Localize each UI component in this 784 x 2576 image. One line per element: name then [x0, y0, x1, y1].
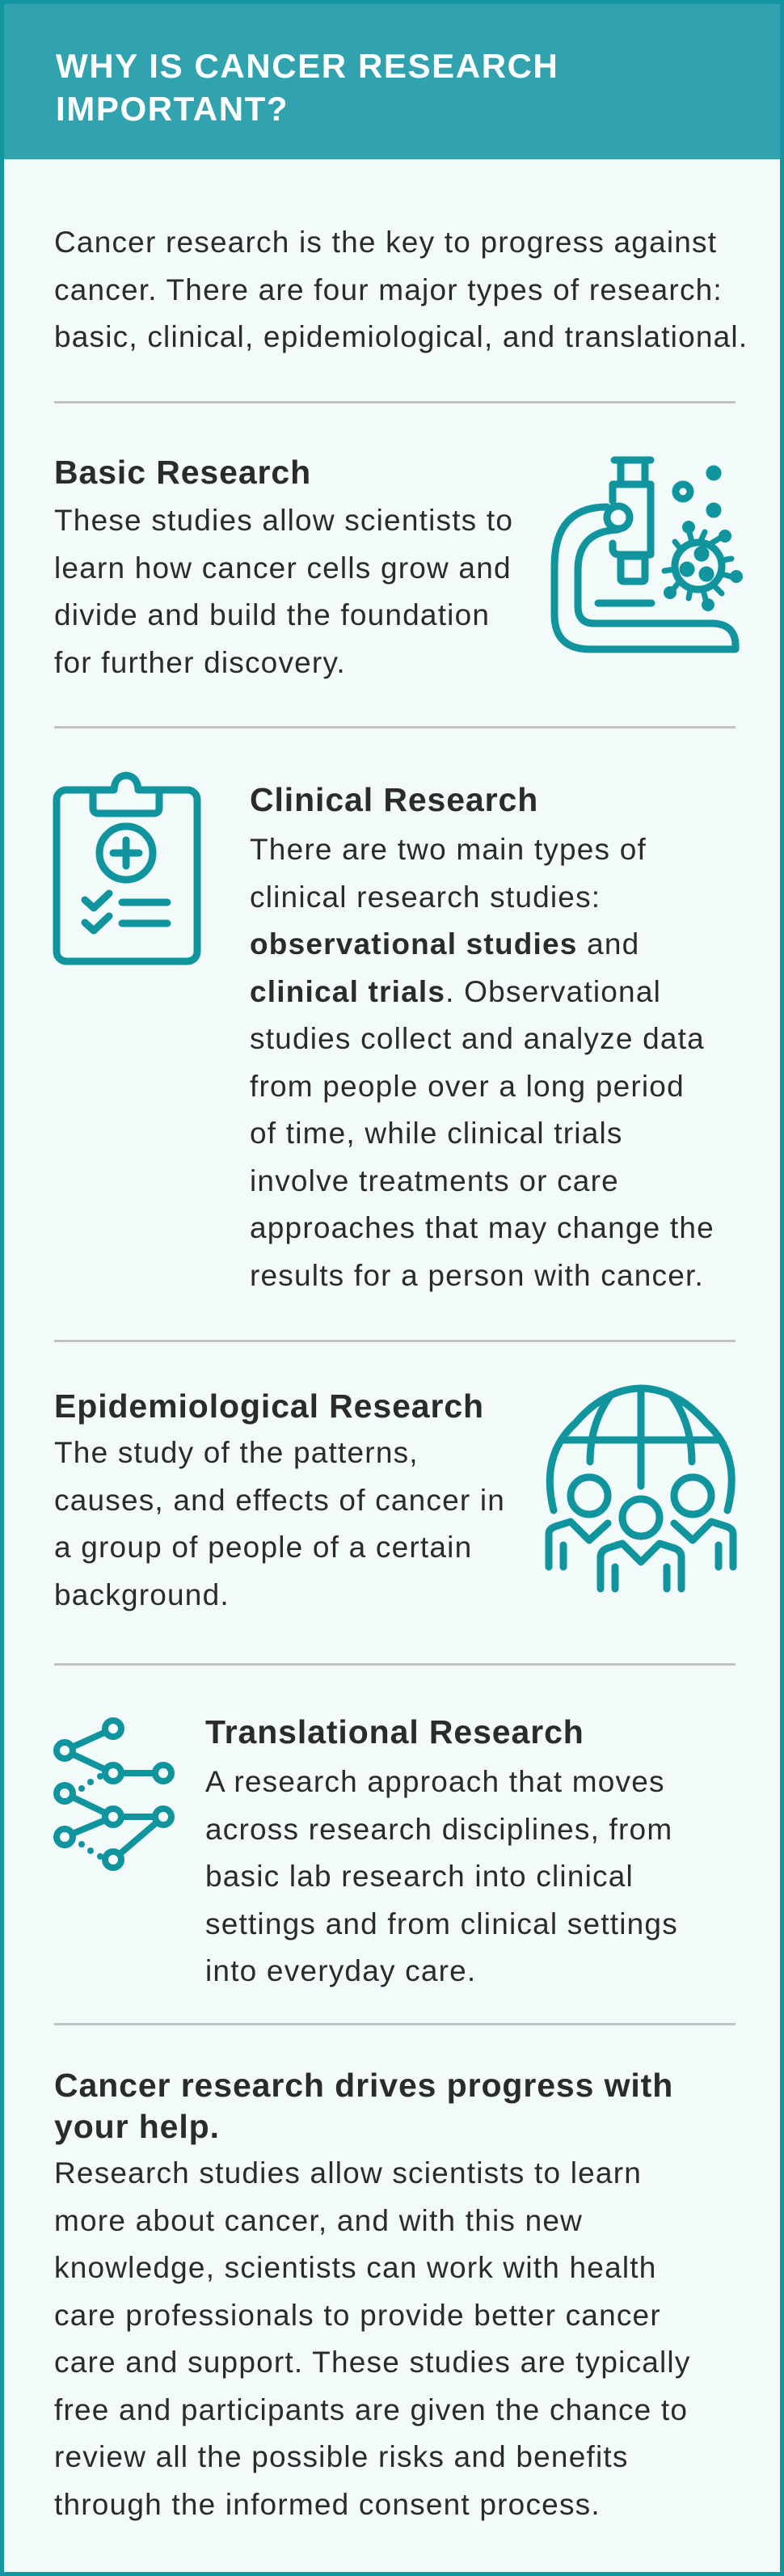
panel: translational research	[205, 1713, 678, 1987]
text: clinical research: clinical trials. Observational	[250, 975, 661, 1007]
text: translational research: settings and from clinical settings	[205, 1907, 678, 1940]
text: translational research: across research disciplines, from	[205, 1813, 672, 1845]
icon: translational network	[53, 1717, 175, 1871]
text: closing: care and support. These studies are typically	[54, 2346, 691, 2379]
title: IMPORTANT?	[56, 90, 289, 128]
text: clinical research: from people over a long period	[250, 1069, 685, 1103]
text: translational research: A research approach that moves	[205, 1765, 665, 1798]
heading: epidemiological research: Epidemiological Research	[54, 1387, 484, 1425]
title	[56, 47, 558, 128]
text: clinical research: clinical research studies:	[250, 880, 601, 914]
heading: clinical research: Clinical Research	[250, 781, 538, 818]
heading: closing: Cancer research drives progress with	[54, 2067, 673, 2104]
panel: epidemiological research	[54, 1387, 505, 1611]
text: translational research	[205, 1765, 678, 1987]
text: closing: Research studies allow scientists to learn	[54, 2156, 642, 2190]
text: closing: free and participants are given the chance to	[54, 2393, 688, 2426]
text: clinical research: There are two main types of	[250, 833, 647, 866]
text: clinical research: studies collect and analyze data	[250, 1022, 705, 1055]
panel: closing message	[54, 2067, 691, 2521]
intro text: Cancer research is the key to progress against	[54, 226, 717, 259]
text: basic research: for further discovery.	[54, 645, 346, 679]
text: epidemiological research: a group of people of a certain	[54, 1531, 472, 1564]
text: basic research: learn how cancer cells grow and	[54, 551, 512, 584]
heading: closing	[54, 2067, 673, 2145]
text: clinical research: approaches that may change the	[250, 1211, 714, 1244]
text: epidemiological research: background.	[54, 1578, 230, 1611]
heading: closing: your help.	[54, 2108, 220, 2145]
intro text: basic, clinical, epidemiological, and translational.	[54, 320, 748, 353]
text: epidemiological research: The study of the patterns,	[54, 1436, 419, 1469]
text: closing: care professionals to provide better cancer	[54, 2298, 661, 2332]
text: translational research: into everyday care.	[205, 1954, 476, 1987]
panel: basic research	[54, 454, 513, 679]
icon: clipboard	[53, 771, 200, 965]
text: clinical research: of time, while clinical trials	[250, 1117, 623, 1150]
text: basic research: These studies allow scientists to	[54, 504, 513, 537]
text: epidemiological research: causes, and effects of cancer in	[54, 1483, 505, 1517]
intro text: cancer. There are four major types of research:	[54, 273, 723, 306]
text: clinical research: results for a person with cancer.	[250, 1258, 704, 1292]
text: clinical research: observational studies and	[250, 927, 639, 961]
title: WHY IS CANCER RESEARCH	[56, 47, 558, 85]
intro text	[54, 226, 748, 353]
text: closing: knowledge, scientists can work with health	[54, 2251, 657, 2284]
text: closing	[54, 2156, 691, 2521]
text: closing: through the informed consent process.	[54, 2487, 601, 2521]
panel: clinical research	[250, 781, 714, 1292]
text: basic research	[54, 504, 513, 679]
text: closing: more about cancer, and with this new	[54, 2204, 583, 2236]
text: clinical research: involve treatments or care	[250, 1164, 619, 1197]
heading: basic research: Basic Research	[54, 454, 311, 491]
header banner	[0, 0, 784, 159]
text: closing: review all the possible risks and benefits	[54, 2440, 629, 2473]
text: basic research: divide and build the foundation	[54, 598, 490, 631]
text: epidemiological research	[54, 1436, 505, 1611]
icon: globe with people	[545, 1384, 737, 1593]
icon: microscope	[551, 456, 743, 653]
text: translational research: basic lab research into clinical	[205, 1860, 634, 1893]
text: clinical research	[250, 833, 714, 1292]
heading: translational research: Translational Research	[205, 1713, 584, 1750]
